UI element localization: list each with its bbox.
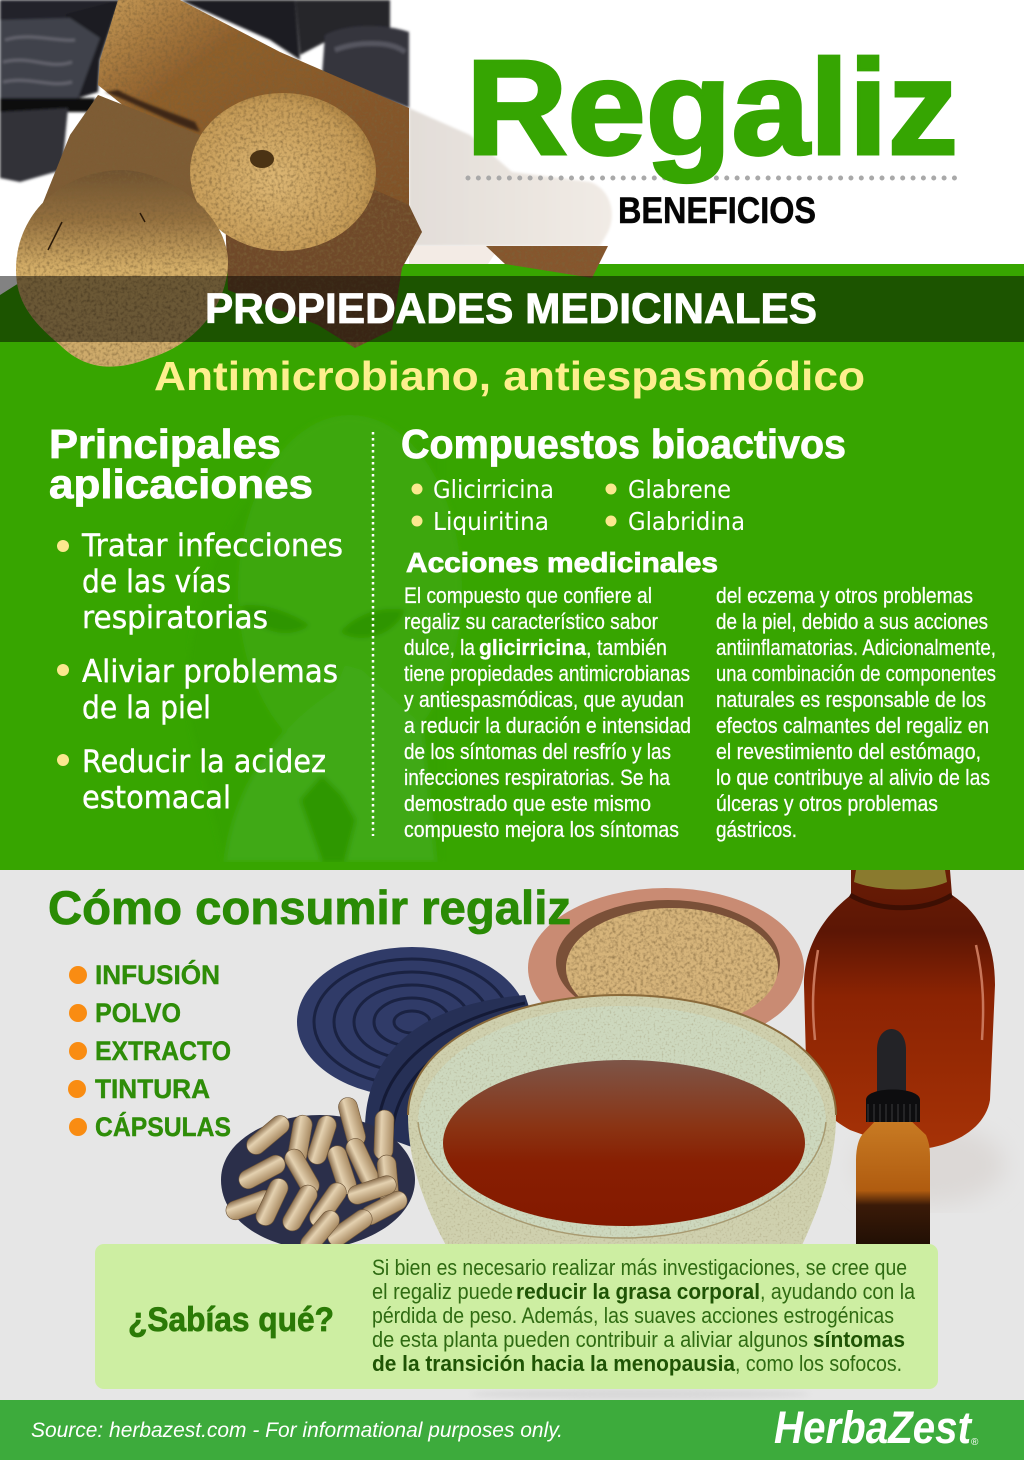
compound list: Glabridina bbox=[628, 507, 745, 536]
heading: como consumir regaliz: Cómo consumir regaliz bbox=[48, 881, 571, 934]
compound list: Glicirricina bbox=[433, 475, 554, 504]
photo: dropper bottle bbox=[856, 1029, 930, 1250]
licorice candies bbox=[0, 0, 409, 182]
panel: compuestos bioactivos bbox=[401, 421, 846, 536]
body text column 1 bbox=[404, 583, 691, 842]
root cut face middle bbox=[190, 93, 376, 251]
source line: Source: herbazest.com - For informational purposes only. bbox=[31, 1419, 563, 1442]
banner: propiedades medicinales bbox=[0, 276, 1024, 342]
list: forms of consumption bbox=[68, 959, 231, 1142]
body text column 1: tiene propiedades antimicrobianas bbox=[404, 661, 690, 686]
photo: licorice wheel bbox=[297, 947, 530, 1150]
root upper bbox=[98, 0, 409, 225]
callout: sabias que bbox=[95, 1244, 938, 1389]
callout text: el regaliz puede bbox=[372, 1279, 513, 1304]
body text column 1: a reducir la duración e intensidad bbox=[404, 713, 691, 738]
callout text: , como los sofocos. bbox=[735, 1351, 902, 1376]
body text column 2: efectos calmantes del regaliz en bbox=[716, 713, 989, 738]
panel: medicinal properties green background bbox=[0, 264, 1024, 870]
list item: infecciones: de las vías bbox=[82, 564, 231, 600]
list item: infecciones: Tratar infecciones bbox=[81, 528, 343, 564]
callout: sabias que: ¿Sabías qué? bbox=[128, 1301, 334, 1339]
list: forms of consumption: EXTRACTO bbox=[95, 1036, 231, 1066]
heading: principales aplicaciones: aplicaciones bbox=[49, 461, 313, 507]
root cut face front bbox=[16, 170, 228, 367]
body text column 2: naturales es responsable de los bbox=[716, 687, 986, 712]
compound list: Liquiritina bbox=[433, 507, 549, 536]
body text column 1: regaliz su característico sabor bbox=[404, 609, 658, 634]
panel: acciones medicinales bbox=[404, 547, 996, 842]
logo: HerbaZest: HerbaZest bbox=[774, 1402, 973, 1453]
body text column 1: El compuesto que confiere al bbox=[404, 583, 652, 608]
subtitle: beneficios: BENEFICIOS bbox=[618, 190, 816, 231]
body text column 2: del eczema y otros problemas bbox=[716, 583, 973, 608]
heading: compuestos bioactivos: Compuestos bioactivos bbox=[401, 421, 846, 467]
body text column 1: compuesto mejora los síntomas bbox=[404, 817, 679, 842]
body text column 1: , también bbox=[586, 635, 667, 660]
photo: capsule bowl bbox=[221, 1095, 415, 1257]
callout text bbox=[372, 1255, 916, 1376]
body text column 2: el revestimiento del estómago, bbox=[716, 739, 981, 764]
heading: principales aplicaciones bbox=[49, 421, 313, 507]
compound list: Glabrene bbox=[628, 475, 731, 504]
panel: como consumir background bbox=[0, 870, 1024, 1400]
panel: principales aplicaciones bbox=[49, 421, 343, 816]
callout text: reducir la grasa corporal bbox=[516, 1279, 760, 1304]
callout text: síntomas bbox=[813, 1327, 905, 1352]
list item: infecciones bbox=[57, 528, 343, 636]
title: Regaliz: Regaliz bbox=[466, 32, 958, 183]
heading: acciones medicinales: Acciones medicinales bbox=[406, 547, 718, 578]
body text column 2: gástricos. bbox=[716, 817, 797, 842]
body text column 1: dulce, la bbox=[404, 635, 476, 660]
body text column 2 bbox=[716, 583, 996, 842]
body text column 2: úlceras y otros problemas bbox=[716, 791, 938, 816]
heading: principales aplicaciones: Principales bbox=[49, 421, 281, 467]
list item: acidez bbox=[57, 744, 326, 816]
logo: HerbaZest: ® bbox=[971, 1437, 979, 1448]
root left bbox=[42, 95, 230, 240]
compound list bbox=[412, 475, 745, 536]
list item: piel bbox=[57, 654, 338, 726]
photo: ceramic bowl of tea bbox=[408, 995, 836, 1270]
list item: piel: de la piel bbox=[82, 690, 211, 726]
body text column 1: infecciones respiratorias. Se ha bbox=[404, 765, 671, 790]
banner: propiedades medicinales: PROPIEDADES MEDICINALES bbox=[205, 285, 817, 333]
list: forms of consumption: INFUSIÓN bbox=[95, 959, 220, 990]
list item: acidez: Reducir la acidez bbox=[82, 744, 326, 780]
body text column 1: y antiespasmódicas, que ayudan bbox=[404, 687, 684, 712]
callout text: de la transición hacia la menopausia bbox=[372, 1351, 736, 1376]
callout text: , ayudando con la bbox=[760, 1279, 916, 1304]
tea liquid bbox=[443, 1060, 805, 1226]
subheading: antimicrobiano: Antimicrobiano, antiespasmódico bbox=[154, 353, 865, 399]
list item: piel: Aliviar problemas bbox=[82, 654, 338, 690]
callout text: Si bien es necesario realizar más investigaciones, se cree que bbox=[372, 1255, 907, 1280]
photo: woman covering her nose, green tint bbox=[224, 415, 462, 862]
photo: dish of licorice powder bbox=[528, 888, 804, 1048]
body text column 1: demostrado que este mismo bbox=[404, 791, 651, 816]
list item: infecciones: respiratorias bbox=[82, 600, 268, 636]
footer bbox=[0, 1400, 1024, 1460]
photo: faded root behind title bbox=[409, 108, 612, 278]
soft shadow under bowl bbox=[470, 1389, 810, 1399]
callout text: de esta planta pueden contribuir a aliviar algunos bbox=[372, 1327, 808, 1352]
body text column 2: lo que contribuye al alivio de las bbox=[716, 765, 990, 790]
photo: licorice root pieces and candies bbox=[0, 0, 422, 367]
body text column 1: de los síntomas del resfrío y las bbox=[404, 739, 671, 764]
list item: acidez: estomacal bbox=[82, 780, 231, 816]
list: forms of consumption: POLVO bbox=[95, 998, 181, 1028]
root lower right bbox=[225, 190, 422, 348]
callout text: pérdida de peso. Además, las suaves acciones estrogénicas bbox=[372, 1303, 894, 1328]
photo: bottle of extract bbox=[804, 870, 1005, 1205]
list: forms of consumption: TINTURA bbox=[95, 1074, 210, 1104]
body text column 1: glicirricina bbox=[479, 635, 587, 660]
list: forms of consumption: CÁPSULAS bbox=[95, 1111, 231, 1142]
